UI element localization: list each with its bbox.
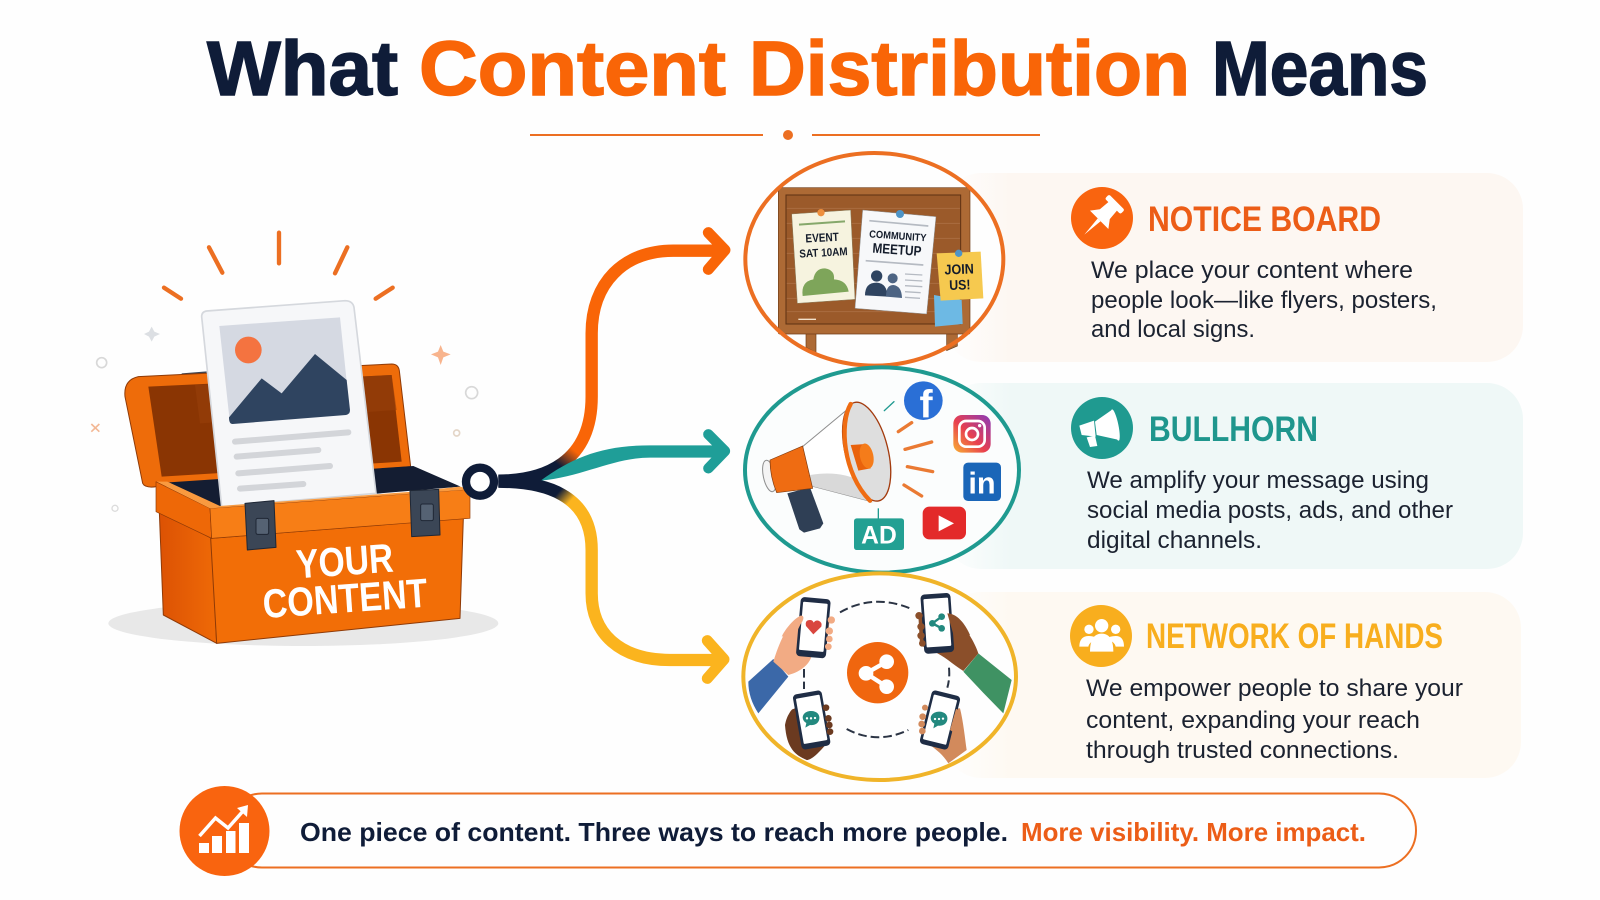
megaphone [760,397,900,533]
icon: people [1070,605,1132,667]
description: and local signs. [1091,316,1255,343]
flyer: community meetup: COMMUNITY [869,229,927,244]
hub node [466,468,494,496]
panel: network of hands background [945,592,1521,778]
box body [156,482,470,643]
burst rays [164,233,393,299]
description: We place your content where [1091,257,1413,284]
title [207,26,1428,112]
description [1086,675,1463,764]
hand and phone: share [915,593,1012,713]
card content: bullhorn [1071,397,1453,554]
heading: NOTICE BOARD [1148,200,1381,239]
sound waves [884,402,933,496]
flyer: community meetup: MEETUP [872,240,922,259]
decorative sparkles [91,327,478,511]
icon: facebook [904,381,943,426]
title: Distribution [749,26,1190,112]
box label: YOUR [295,535,395,587]
card content: network of hands [1070,605,1463,764]
sticky note: join us [937,250,983,301]
box interior [165,466,461,507]
description: social media posts, ads, and other [1087,497,1453,524]
box label [261,535,429,627]
description: content, expanding your reach [1086,707,1420,734]
illustration: notice board [745,153,1003,366]
heading: NETWORK OF HANDS [1146,617,1443,656]
sticky note: join us: US! [949,276,971,293]
latch right [410,489,440,537]
description [1087,467,1453,554]
content document [202,301,376,507]
card content: notice board [1071,187,1437,343]
arrow: to network of hands [498,482,724,678]
icon: linkedin [963,463,1001,501]
ellipse ring: orange [745,153,1003,366]
hand and phone: heart [748,597,835,713]
banner message: One piece of content. Three ways to reach more people. [300,817,1008,847]
bottom banner [180,786,1416,876]
ellipse ring: teal [745,367,1019,573]
wooden board [778,188,970,334]
icon: ad tag [854,508,904,550]
description: digital channels. [1087,527,1262,554]
banner highlight: More visibility. More impact. [1021,817,1366,847]
dashed share loop [804,602,949,737]
title: Content [419,26,726,112]
sticky note: join us: JOIN [944,260,974,278]
description: We empower people to share your [1086,675,1463,702]
description: through trusted connections. [1086,737,1399,764]
panel: notice board background [945,173,1523,362]
flyer: event: SAT 10AM [799,246,848,261]
icon: ad tag: AD [861,522,897,549]
panel: bullhorn background [945,383,1523,569]
ellipse fill [745,153,1003,366]
title: What [207,26,398,112]
description: people look—like flyers, posters, [1091,287,1437,314]
connector arrows [466,233,725,678]
banner outline [225,794,1416,868]
description [1091,257,1437,343]
icon: pushpin [1071,187,1133,249]
hand and phone: chat left [785,690,833,760]
illustration: bullhorn and social channels [745,367,1019,573]
arrow: to bullhorn [541,434,725,481]
hand and phone: chat right [918,690,967,763]
box label: CONTENT [261,570,429,627]
flyer: event [792,209,855,303]
title: Means [1212,26,1428,112]
illustration: content toolbox [91,233,498,646]
latch left [245,501,276,550]
flyer: event: EVENT [805,230,840,246]
open lid [125,364,411,487]
icon: youtube [923,507,966,539]
flyer: community meetup [855,210,936,314]
illustration: network of hands [743,573,1016,780]
heading: BULLHORN [1149,410,1318,449]
icon: growth chart [180,786,270,876]
share badge [847,642,908,703]
icon: linkedin: in [968,466,996,500]
icon: instagram [953,415,991,453]
icon: bullhorn [1071,397,1133,459]
ellipse ring: yellow [743,573,1016,780]
icon: facebook: f [919,382,933,426]
board legs [806,333,957,353]
description: We amplify your message using [1087,467,1429,494]
ground shadow [108,601,498,646]
arrow: to notice board [498,233,725,481]
sticky note: blue [934,295,963,327]
